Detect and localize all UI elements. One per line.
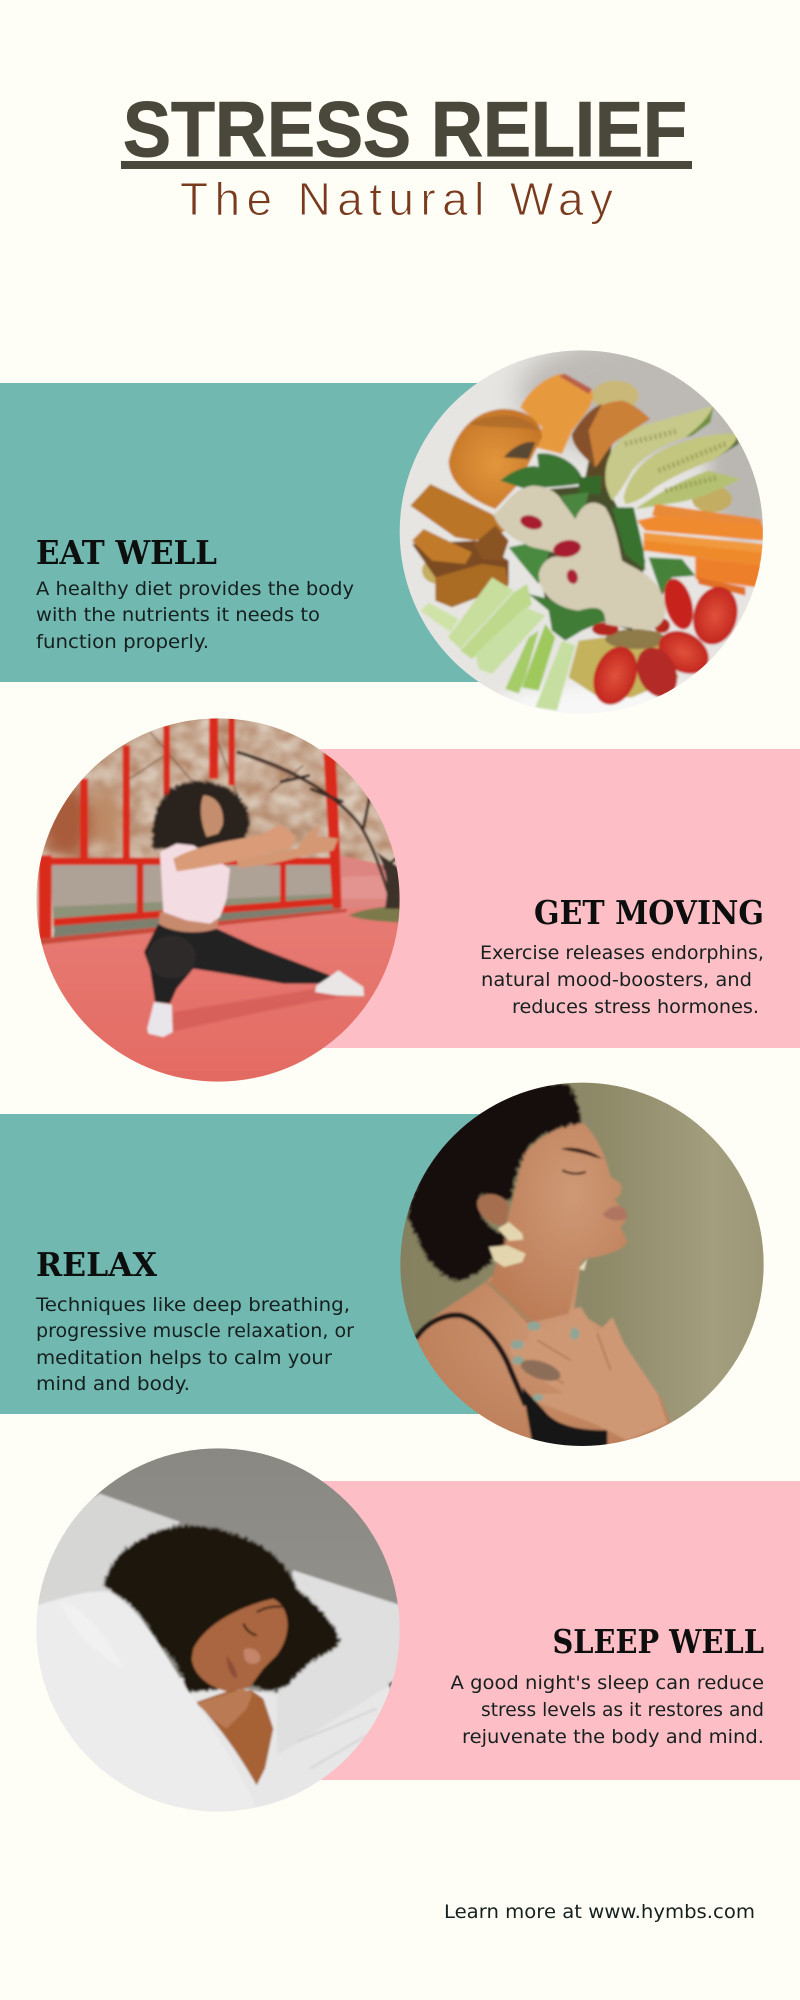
duvet — [30, 1591, 260, 1818]
hair — [152, 781, 249, 850]
far pillow — [30, 1494, 180, 1609]
body text: relax: meditation helps to calm your — [36, 1347, 332, 1369]
subtitle: The Natural Way — [180, 173, 613, 225]
photo: woman sleeping — [30, 1442, 406, 1818]
pink wall — [340, 855, 403, 912]
hand — [511, 1307, 667, 1440]
arm and hand — [197, 1690, 273, 1785]
panel: relax — [0, 1077, 770, 1453]
ground — [30, 905, 406, 1088]
face and neck — [491, 1123, 627, 1324]
body text: sleep well: A good night's sleep can reduce — [450, 1672, 764, 1694]
title: STRESS RELIEF — [123, 85, 687, 173]
photo: salad bowl — [400, 350, 763, 712]
body text: relax — [35, 1294, 354, 1395]
leggings — [144, 924, 330, 1004]
heading: eat well: EAT WELL — [36, 533, 217, 572]
body text: eat well: function properly. — [36, 631, 209, 653]
earrings — [498, 1222, 523, 1241]
sweet potato — [520, 374, 593, 454]
far arm — [237, 824, 338, 868]
ear — [477, 1194, 509, 1227]
fence — [50, 863, 334, 916]
sauce — [494, 486, 665, 631]
body text: eat well — [36, 578, 354, 653]
teal band — [0, 383, 560, 682]
hair — [103, 1526, 340, 1692]
body text: get moving: natural mood-boosters, and — [481, 969, 752, 991]
body text: relax: progressive muscle relaxation, or — [36, 1320, 354, 1342]
shirt — [160, 844, 230, 924]
grass — [348, 907, 402, 923]
body text: get moving: reduces stress hormones. — [512, 996, 759, 1018]
shoes — [147, 1002, 173, 1037]
greens — [500, 453, 582, 489]
tree — [237, 752, 400, 909]
body text: eat well: A healthy diet provides the body — [36, 578, 354, 600]
heading: relax: RELAX — [36, 1245, 157, 1284]
strap and top — [416, 1315, 526, 1405]
tofu — [412, 541, 509, 584]
photo: woman exercising — [30, 712, 406, 1088]
face — [201, 795, 223, 837]
shadow — [172, 989, 339, 1031]
duvet shadow — [93, 1591, 163, 1659]
right pillow — [260, 1570, 406, 1759]
nails — [511, 1321, 579, 1401]
necklace — [486, 1281, 532, 1324]
hair — [407, 1084, 581, 1280]
body text: get moving: Exercise releases endorphins, — [480, 942, 764, 964]
panel: sleep well — [30, 1442, 800, 1818]
pomegranate — [519, 513, 544, 532]
body text: sleep well — [450, 1672, 764, 1748]
face — [192, 1599, 288, 1692]
body text: eat well: with the nutrients it needs to — [36, 604, 320, 626]
carrots — [652, 504, 764, 531]
panel: eat well — [0, 350, 763, 712]
body text: sleep well: stress levels as it restores and — [481, 1699, 764, 1721]
body text: relax: Techniques like deep breathing, — [35, 1294, 350, 1316]
title block — [121, 85, 692, 225]
cucumber — [420, 602, 459, 632]
midriff — [158, 912, 220, 935]
panel: get moving — [30, 712, 800, 1088]
pink band — [240, 1481, 800, 1780]
near arm — [173, 825, 297, 871]
sheet — [180, 1675, 406, 1818]
heading: sleep well: SLEEP WELL — [552, 1622, 764, 1661]
body text: get moving — [480, 942, 764, 1018]
footer link text: Learn more at www.hymbs.com — [444, 1901, 755, 1923]
teal band — [0, 1114, 560, 1414]
back / shoulder — [414, 1264, 671, 1453]
tomatoes — [662, 577, 696, 631]
ring — [520, 1359, 562, 1382]
body text: sleep well: rejuvenate the body and mind. — [462, 1726, 764, 1748]
pink band — [240, 749, 800, 1048]
heading: get moving: GET MOVING — [534, 893, 764, 932]
title underline — [121, 161, 692, 169]
photo: woman breathing — [394, 1077, 770, 1453]
avocado — [605, 406, 714, 501]
body text: relax: mind and body. — [36, 1373, 190, 1395]
